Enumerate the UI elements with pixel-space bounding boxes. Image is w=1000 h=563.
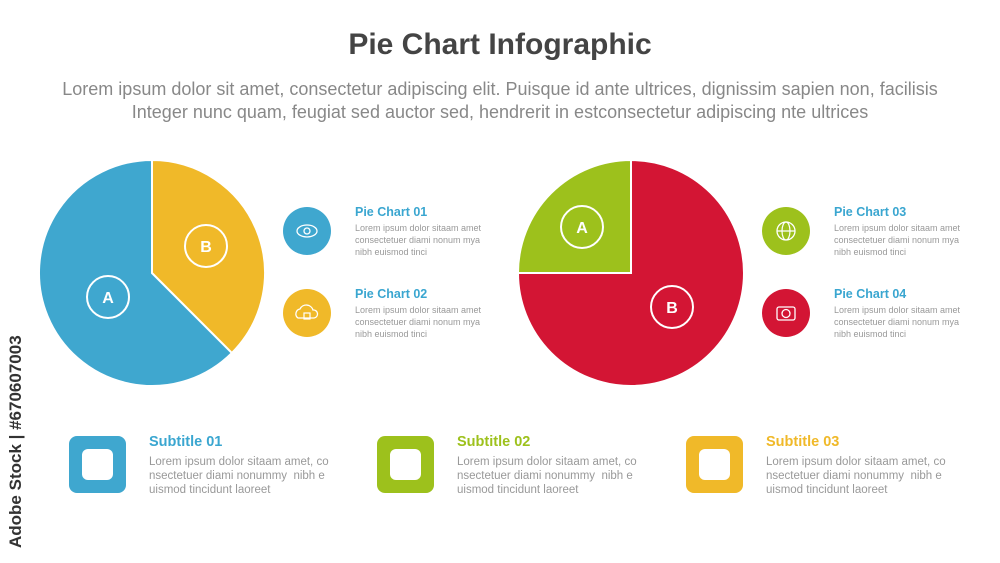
text: pie chart 02: Lorem ipsum dolor sitaam amet (355, 305, 481, 315)
text: pie chart 03: Lorem ipsum dolor sitaam amet (834, 223, 960, 233)
text: pie chart 04: consectetuer diami nonum mya (834, 317, 959, 327)
subtitle 03: Lorem ipsum dolor sitaam amet, co (766, 456, 946, 468)
pie chart left: B (200, 239, 212, 256)
text: pie chart 04: Lorem ipsum dolor sitaam amet (834, 305, 960, 315)
text: pie chart 02: nibh euismod tinci (355, 329, 427, 339)
text: pie chart 02 (355, 287, 481, 339)
text: pie chart 03: Pie Chart 03 (834, 205, 906, 219)
text: pie chart 01: consectetuer diami nonum mya (355, 235, 480, 245)
subtitle 02: Lorem ipsum dolor sitaam amet, co (457, 456, 637, 468)
subtitle 03 (766, 434, 946, 496)
icon: camera (762, 289, 810, 337)
square icon 01 (69, 436, 126, 493)
pie chart right: A (576, 220, 588, 237)
watermark vertical text: Adobe Stock | #670607003 (6, 335, 25, 548)
subtitle text: Integer nunc quam, feugiat sed auctor sed, hendrerit in estconsectetur adipiscing nte ultrices (132, 102, 868, 122)
subtitle text (62, 79, 938, 122)
subtitle 02: uismod tincidunt laoreet (457, 484, 578, 496)
subtitle 01: uismod tincidunt laoreet (149, 484, 270, 496)
text: pie chart 01: nibh euismod tinci (355, 247, 427, 257)
pie chart right: B (666, 300, 678, 317)
text: pie chart 03 (834, 205, 960, 257)
subtitle 01 (149, 434, 329, 496)
text: pie chart 04 (834, 287, 960, 339)
text: pie chart 03: nibh euismod tinci (834, 247, 906, 257)
square icon 03 (686, 436, 743, 493)
text: pie chart 01: Pie Chart 01 (355, 205, 427, 219)
text: pie chart 01 (355, 205, 481, 257)
subtitle 01: Lorem ipsum dolor sitaam amet, co (149, 456, 329, 468)
text: pie chart 04: nibh euismod tinci (834, 329, 906, 339)
title: Pie Chart Infographic (348, 28, 652, 61)
subtitle 03: nsectetuer diami nonummy nibh e (766, 470, 942, 482)
text: pie chart 03: consectetuer diami nonum mya (834, 235, 959, 245)
text: pie chart 02: Pie Chart 02 (355, 287, 427, 301)
subtitle 01: Subtitle 01 (149, 434, 222, 450)
icon: cloud lock (283, 289, 331, 337)
text: pie chart 04: Pie Chart 04 (834, 287, 906, 301)
pie chart right (518, 160, 744, 386)
pie chart left: A (102, 290, 114, 307)
subtitle 03: uismod tincidunt laoreet (766, 484, 887, 496)
icon: eye (283, 207, 331, 255)
subtitle 02 (457, 434, 637, 496)
subtitle text: Lorem ipsum dolor sit amet, consectetur adipiscing elit. Puisque id ante ultrices, dignissim sapien non, facilisis (62, 79, 938, 99)
subtitle 01: nsectetuer diami nonummy nibh e (149, 470, 325, 482)
pie chart left (39, 160, 265, 386)
text: pie chart 01: Lorem ipsum dolor sitaam amet (355, 223, 481, 233)
subtitle 03: Subtitle 03 (766, 434, 839, 450)
square icon 02 (377, 436, 434, 493)
subtitle 02: nsectetuer diami nonummy nibh e (457, 470, 633, 482)
text: pie chart 02: consectetuer diami nonum mya (355, 317, 480, 327)
icon: globe (762, 207, 810, 255)
subtitle 02: Subtitle 02 (457, 434, 530, 450)
